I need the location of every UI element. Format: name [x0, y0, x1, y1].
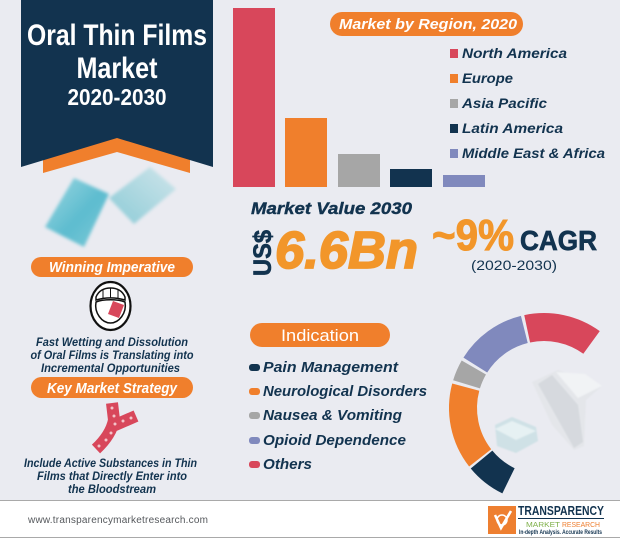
text: winning imperative description	[30, 337, 194, 375]
footer: www.transparencymarketresearch.com	[27, 515, 208, 526]
text: winning imperative description: Incremental Opportunities	[41, 363, 180, 375]
legend: indication: Pain Management	[263, 360, 399, 376]
logo: transparency market research	[488, 504, 605, 536]
title banner: Oral Thin Films	[27, 19, 207, 52]
bar chart: market by region	[233, 8, 485, 187]
icon: y-shaped film strip	[96, 403, 136, 449]
heading: indication	[250, 323, 390, 347]
donut chart: indication share	[430, 294, 620, 522]
legend: indication	[249, 360, 427, 473]
logo: transparency market research: RESEARCH	[562, 520, 600, 529]
title banner: 2020-2030	[68, 84, 166, 110]
logo: transparency market research: MARKET	[526, 520, 560, 529]
title banner	[21, 0, 213, 173]
stat: cagr: ~9%	[432, 211, 514, 260]
legend: regions: Latin America	[462, 120, 563, 136]
legend: regions	[450, 45, 605, 161]
legend: indication: Neurological Disorders	[263, 384, 427, 400]
text: market value 2030: Market Value 2030	[251, 199, 413, 218]
text: key market strategy description	[24, 458, 197, 496]
legend: indication: Nausea & Vomiting	[263, 408, 402, 424]
heading: market by region	[330, 12, 523, 36]
legend: regions: Middle East & Africa	[462, 145, 605, 161]
heading: winning imperative: Winning Imperative	[49, 260, 175, 276]
text: winning imperative description: Fast Wetting and Dissolution	[36, 337, 188, 349]
logo: transparency market research: TRANSPARENCY	[518, 504, 605, 518]
text: winning imperative description: of Oral Films is Translating into	[30, 350, 194, 362]
heading: key market strategy: Key Market Strategy	[47, 381, 178, 397]
stat: cagr: CAGR	[520, 225, 597, 256]
heading: market by region: Market by Region, 2020	[339, 16, 518, 33]
legend: indication: Opioid Dependence	[263, 433, 406, 449]
title banner: Market	[76, 52, 158, 85]
text: key market strategy description: Films that Directly Enter into	[37, 471, 187, 483]
legend: regions: North America	[462, 45, 567, 61]
legend: regions: Asia Pacific	[461, 95, 547, 111]
text: key market strategy description: the Bloodstream	[68, 484, 156, 496]
icon: oral thin films	[45, 167, 176, 247]
text: key market strategy description: Include Active Substances in Thin	[24, 458, 197, 470]
icon: film product render	[495, 370, 602, 453]
logo: transparency market research: In-depth Analysis. Accurate Results	[519, 530, 603, 536]
heading: indication: Indication	[281, 326, 359, 345]
legend: regions: Europe	[462, 70, 513, 86]
stat: cagr	[432, 211, 597, 273]
heading: winning imperative	[31, 257, 193, 277]
icon: open mouth with film	[90, 282, 130, 330]
legend: indication: Others	[263, 457, 312, 473]
footer	[0, 500, 620, 538]
stat: market value: US$	[249, 230, 277, 276]
heading: key market strategy	[31, 377, 193, 398]
stat: market value: 6.6Bn	[275, 222, 418, 280]
stat: cagr: (2020-2030)	[471, 257, 557, 273]
